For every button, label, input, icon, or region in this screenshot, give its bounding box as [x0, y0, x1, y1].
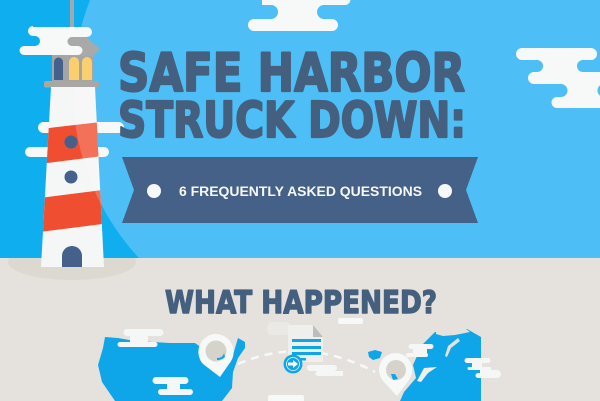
cloud: over lighthouse top: [20, 26, 92, 55]
northern coast inlet: [445, 338, 460, 357]
cloud: top right: [516, 48, 600, 108]
cloud bottom centre: [268, 395, 304, 401]
title: [118, 43, 466, 149]
window: lit lantern pane: [69, 57, 79, 80]
mast: [70, 0, 74, 30]
banner: [122, 157, 478, 223]
cloud top right of document: [338, 318, 363, 324]
icon: transfer arrow: [284, 354, 302, 374]
window: lit lantern pane right: [82, 57, 92, 80]
window: dark lantern pane: [54, 58, 63, 80]
heading: what happened: WHAT HAPPENED?: [165, 285, 437, 321]
title: STRUCK DOWN:: [118, 92, 466, 149]
map: europe: [379, 329, 501, 401]
cloud on US map south: [152, 377, 193, 395]
panel: ground: [0, 258, 600, 401]
location pin Europe: [379, 353, 412, 396]
banner dot left: [147, 184, 161, 198]
lighthouse shadow: [8, 258, 136, 280]
cloud: top centre: [248, 0, 351, 31]
northern snow: [436, 329, 470, 336]
document icon: [288, 325, 323, 362]
lighthouse roof: [68, 37, 100, 56]
round window lower: [64, 170, 78, 184]
lantern room: [52, 52, 93, 82]
map: united states: [98, 329, 245, 401]
gallery: [44, 81, 99, 88]
banner text: 6 FREQUENTLY ASKED QUESTIONS: [179, 184, 422, 199]
banner dot right: [438, 184, 452, 198]
cloud on Europe east: [464, 358, 501, 378]
tower: [41, 87, 104, 267]
red stripes: [43, 122, 102, 232]
cloud: behind lighthouse upper: [38, 122, 124, 133]
door: [62, 246, 82, 267]
cloud below document: [307, 365, 343, 376]
title: SAFE HARBOR: [118, 43, 465, 104]
faint cloud near document: [267, 322, 291, 335]
round window upper: [64, 136, 78, 148]
dashed transfer arc: [238, 351, 375, 372]
light shade on tower: [76, 92, 101, 204]
cloud on Europe west: [406, 344, 434, 357]
location pin US: [198, 334, 234, 377]
lighthouse: [40, 0, 110, 267]
baltic inlet: [417, 367, 437, 382]
cloud on US map north: [118, 329, 164, 347]
map: iceland: [368, 350, 382, 360]
cloud: behind lighthouse lower: [25, 147, 109, 157]
